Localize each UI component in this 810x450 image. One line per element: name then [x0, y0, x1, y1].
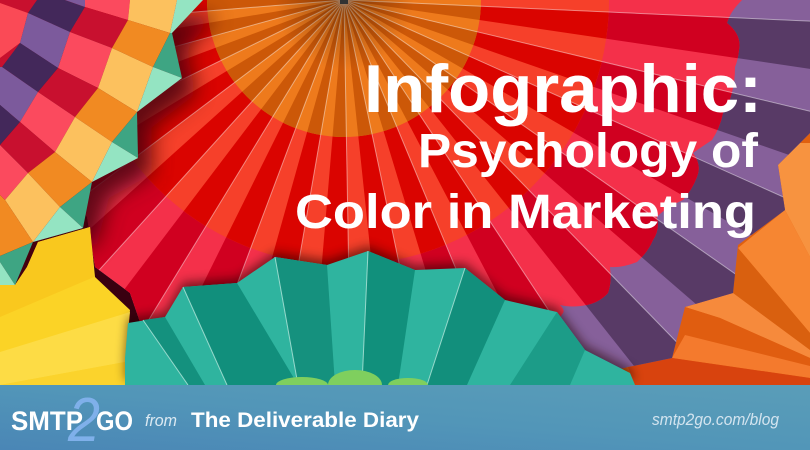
band: purple outer pleats — [88, 0, 810, 369]
title line 3: Color in Marketing — [295, 186, 756, 239]
title line 1: Infographic: — [364, 51, 762, 127]
shadow: checked fan — [14, 16, 217, 301]
label: from: from — [145, 411, 177, 430]
logo: SMTP2GO: GO — [96, 406, 133, 436]
teal fan creases — [143, 251, 465, 385]
fan centre shading — [281, 0, 407, 63]
panel: teal paper fan — [125, 251, 635, 400]
label: publication name: The Deliverable Diary — [191, 409, 419, 432]
label: blog url: smtp2go.com/blog — [652, 410, 779, 429]
band: orange pleats — [207, 0, 481, 137]
footer bar — [0, 385, 810, 450]
title — [295, 51, 762, 239]
band: red pleats — [137, 0, 609, 264]
panel: right orange paper fan — [620, 78, 810, 385]
title line 2: Psychology of — [418, 125, 759, 178]
shadow: green fan — [125, 246, 635, 380]
logo: SMTP2GO — [11, 386, 133, 450]
fan hub — [340, 0, 348, 4]
band: pink red pleats — [0, 0, 742, 322]
fan creases — [90, 0, 810, 342]
panel: yellow paper fan — [0, 227, 137, 385]
lime centre scallops — [276, 370, 428, 400]
panel: checked paper fan — [0, 0, 203, 285]
logo: SMTP2GO: SMTP — [11, 406, 83, 436]
